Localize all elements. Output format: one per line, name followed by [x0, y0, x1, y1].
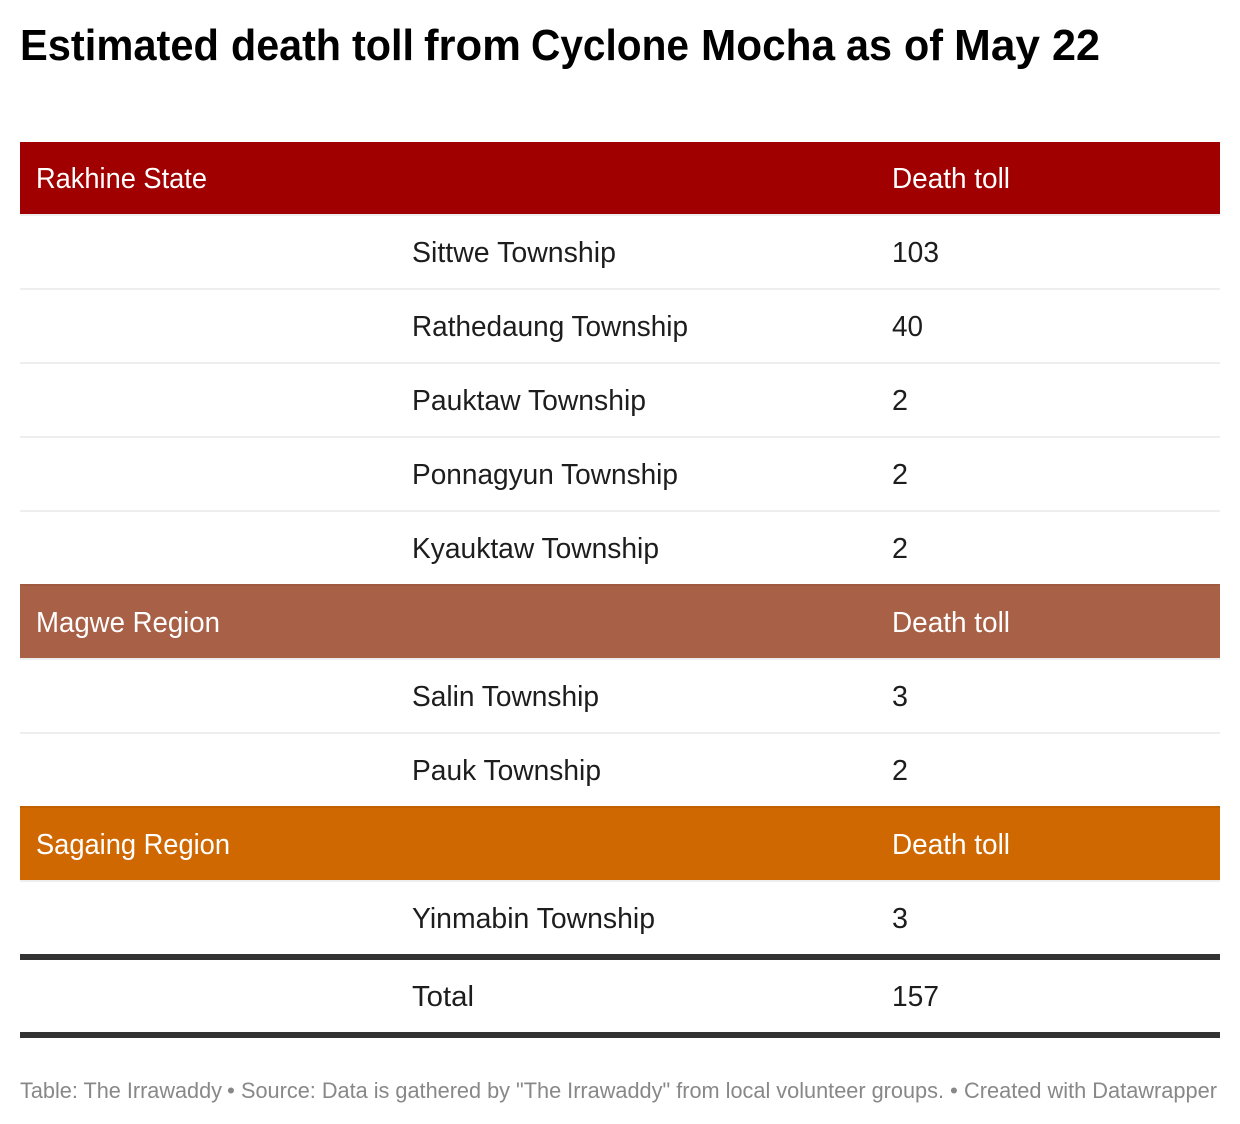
row: Rathedaung Township: [20, 311, 1220, 364]
table: [20, 142, 1220, 1038]
row: Total: [20, 954, 1220, 1038]
row: Rathedaung Township: Rathedaung Township: [412, 311, 688, 343]
title: death: [231, 21, 341, 70]
header: Rakhine State: Rakhine State: [36, 163, 207, 195]
row: Yinmabin Township: Yinmabin Township: [412, 903, 655, 935]
row: Pauk Township: 2: [892, 755, 908, 787]
header: Sagaing Region: Death toll: [892, 829, 1010, 861]
header: Sagaing Region: Sagaing Region: [36, 829, 230, 861]
row: Ponnagyun Township: 2: [892, 459, 908, 491]
footer: source note: Created with Datawrapper: [964, 1078, 1217, 1103]
row: Total: 157: [892, 981, 939, 1013]
row: Rathedaung Township: 40: [892, 311, 923, 343]
title: of: [904, 21, 943, 70]
footer: source note: •: [950, 1078, 958, 1103]
title: Estimated: [20, 21, 219, 70]
row: Salin Township: 3: [892, 681, 908, 713]
title: May: [954, 21, 1041, 70]
row: Yinmabin Township: 3: [892, 903, 908, 935]
title: from: [424, 21, 521, 70]
header: Sagaing Region: [20, 806, 1220, 882]
row: Ponnagyun Township: [20, 459, 1220, 512]
row: Yinmabin Township: [412, 903, 908, 935]
row: Sittwe Township: Sittwe Township: [412, 237, 616, 269]
footer: source note: Source: Data is gathered by "The Irrawaddy" from local volunteer groups.: [241, 1078, 944, 1103]
row: Kyauktaw Township: Kyauktaw Township: [412, 533, 659, 565]
title: Cyclone: [531, 21, 689, 70]
header: Rakhine State: [20, 142, 1220, 216]
header: Rakhine State: Death toll: [892, 163, 1010, 195]
title: 22: [1052, 21, 1100, 70]
row: Sittwe Township: [20, 237, 1220, 290]
row: Ponnagyun Township: Ponnagyun Township: [412, 459, 678, 491]
header: Magwe Region: [20, 584, 1220, 660]
title: toll: [352, 21, 414, 70]
row: Pauk Township: Pauk Township: [412, 755, 601, 787]
row: Pauktaw Township: Pauktaw Township: [412, 385, 646, 417]
row: Salin Township: [20, 681, 1220, 734]
header: Magwe Region: Death toll: [892, 607, 1010, 639]
row: Kyauktaw Township: 2: [892, 533, 908, 565]
row: Pauktaw Township: 2: [892, 385, 908, 417]
footer: source note: •: [227, 1078, 235, 1103]
row: Kyauktaw Township: [412, 533, 908, 565]
row: Salin Township: Salin Township: [412, 681, 599, 713]
row: Total: Total: [412, 981, 474, 1013]
row: Pauk Township: [412, 755, 908, 787]
footer: source note: Table: The Irrawaddy: [20, 1078, 223, 1103]
row: Pauktaw Township: [20, 385, 1220, 438]
title: Mocha: [701, 21, 835, 70]
row: Sittwe Township: 103: [892, 237, 939, 269]
header: Magwe Region: Magwe Region: [36, 607, 220, 639]
title: as: [846, 21, 892, 70]
